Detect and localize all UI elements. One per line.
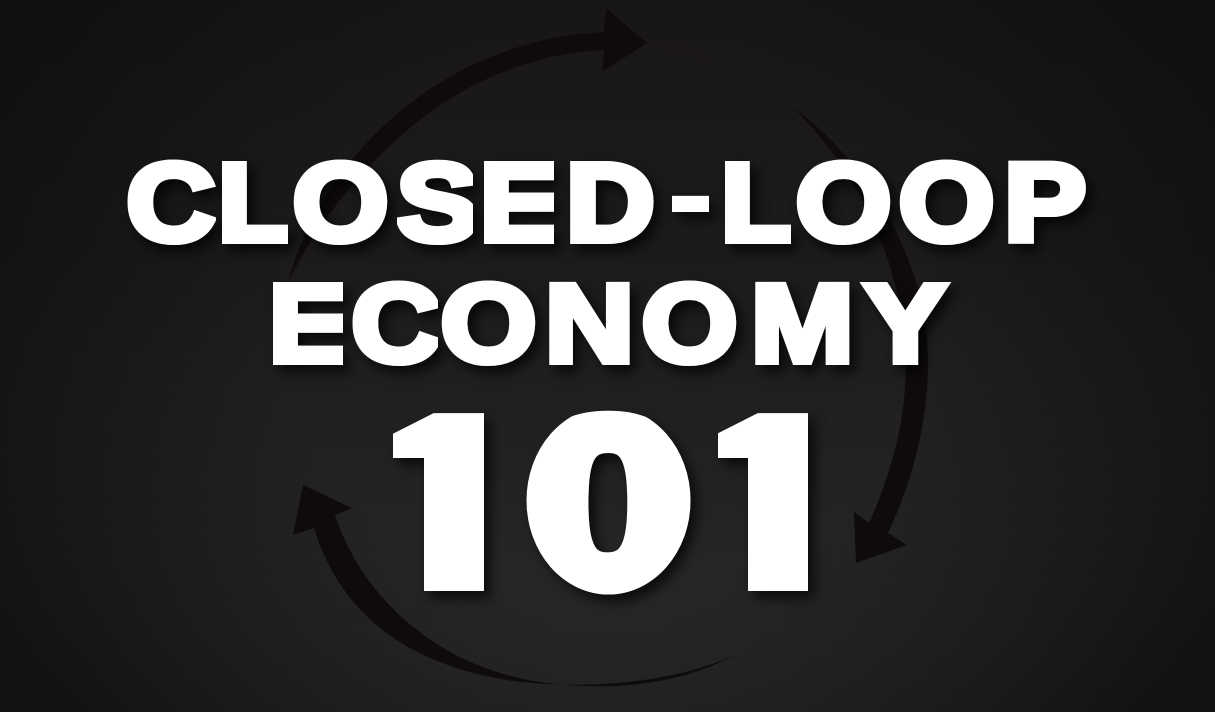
arrow: bottom — [293, 485, 735, 686]
title line: closed-loop: CLOSED-LOOP — [126, 135, 1086, 264]
title — [128, 160, 1092, 604]
arrow: right — [793, 107, 928, 563]
arrow: top — [288, 8, 647, 282]
title line: economy: ECONOMY — [268, 262, 946, 385]
loop arrows — [288, 8, 928, 686]
title number: 101: 101 — [364, 372, 856, 634]
